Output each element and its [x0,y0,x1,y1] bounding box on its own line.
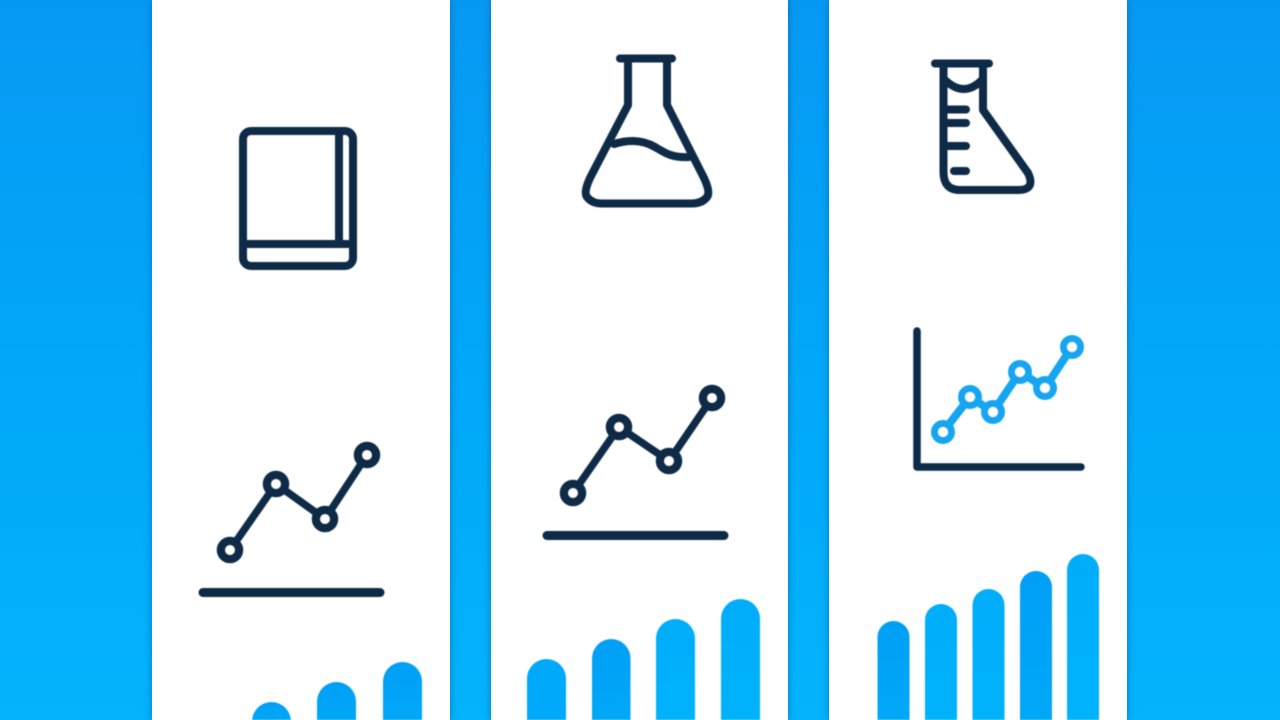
line chart: panel 3 [917,331,1081,467]
panel 3 card [829,0,1127,720]
line chart: panel 2 [547,389,724,536]
panel 2 card [491,0,788,720]
icon: book [243,131,353,266]
bar chart: panel 1 [252,662,422,720]
panel: beaker column [829,0,1127,720]
line chart: panel 1 [203,446,380,592]
icon: graduated beaker [935,64,1030,190]
data series [934,338,1080,440]
icon: erlenmeyer flask [586,58,708,204]
chart axes [917,331,1081,467]
panel: flask column [491,0,788,720]
bar chart: panel 2 [527,599,760,720]
panel: book column [152,0,450,720]
panel 1 card [152,0,450,720]
bar chart: panel 3 [878,554,1099,720]
